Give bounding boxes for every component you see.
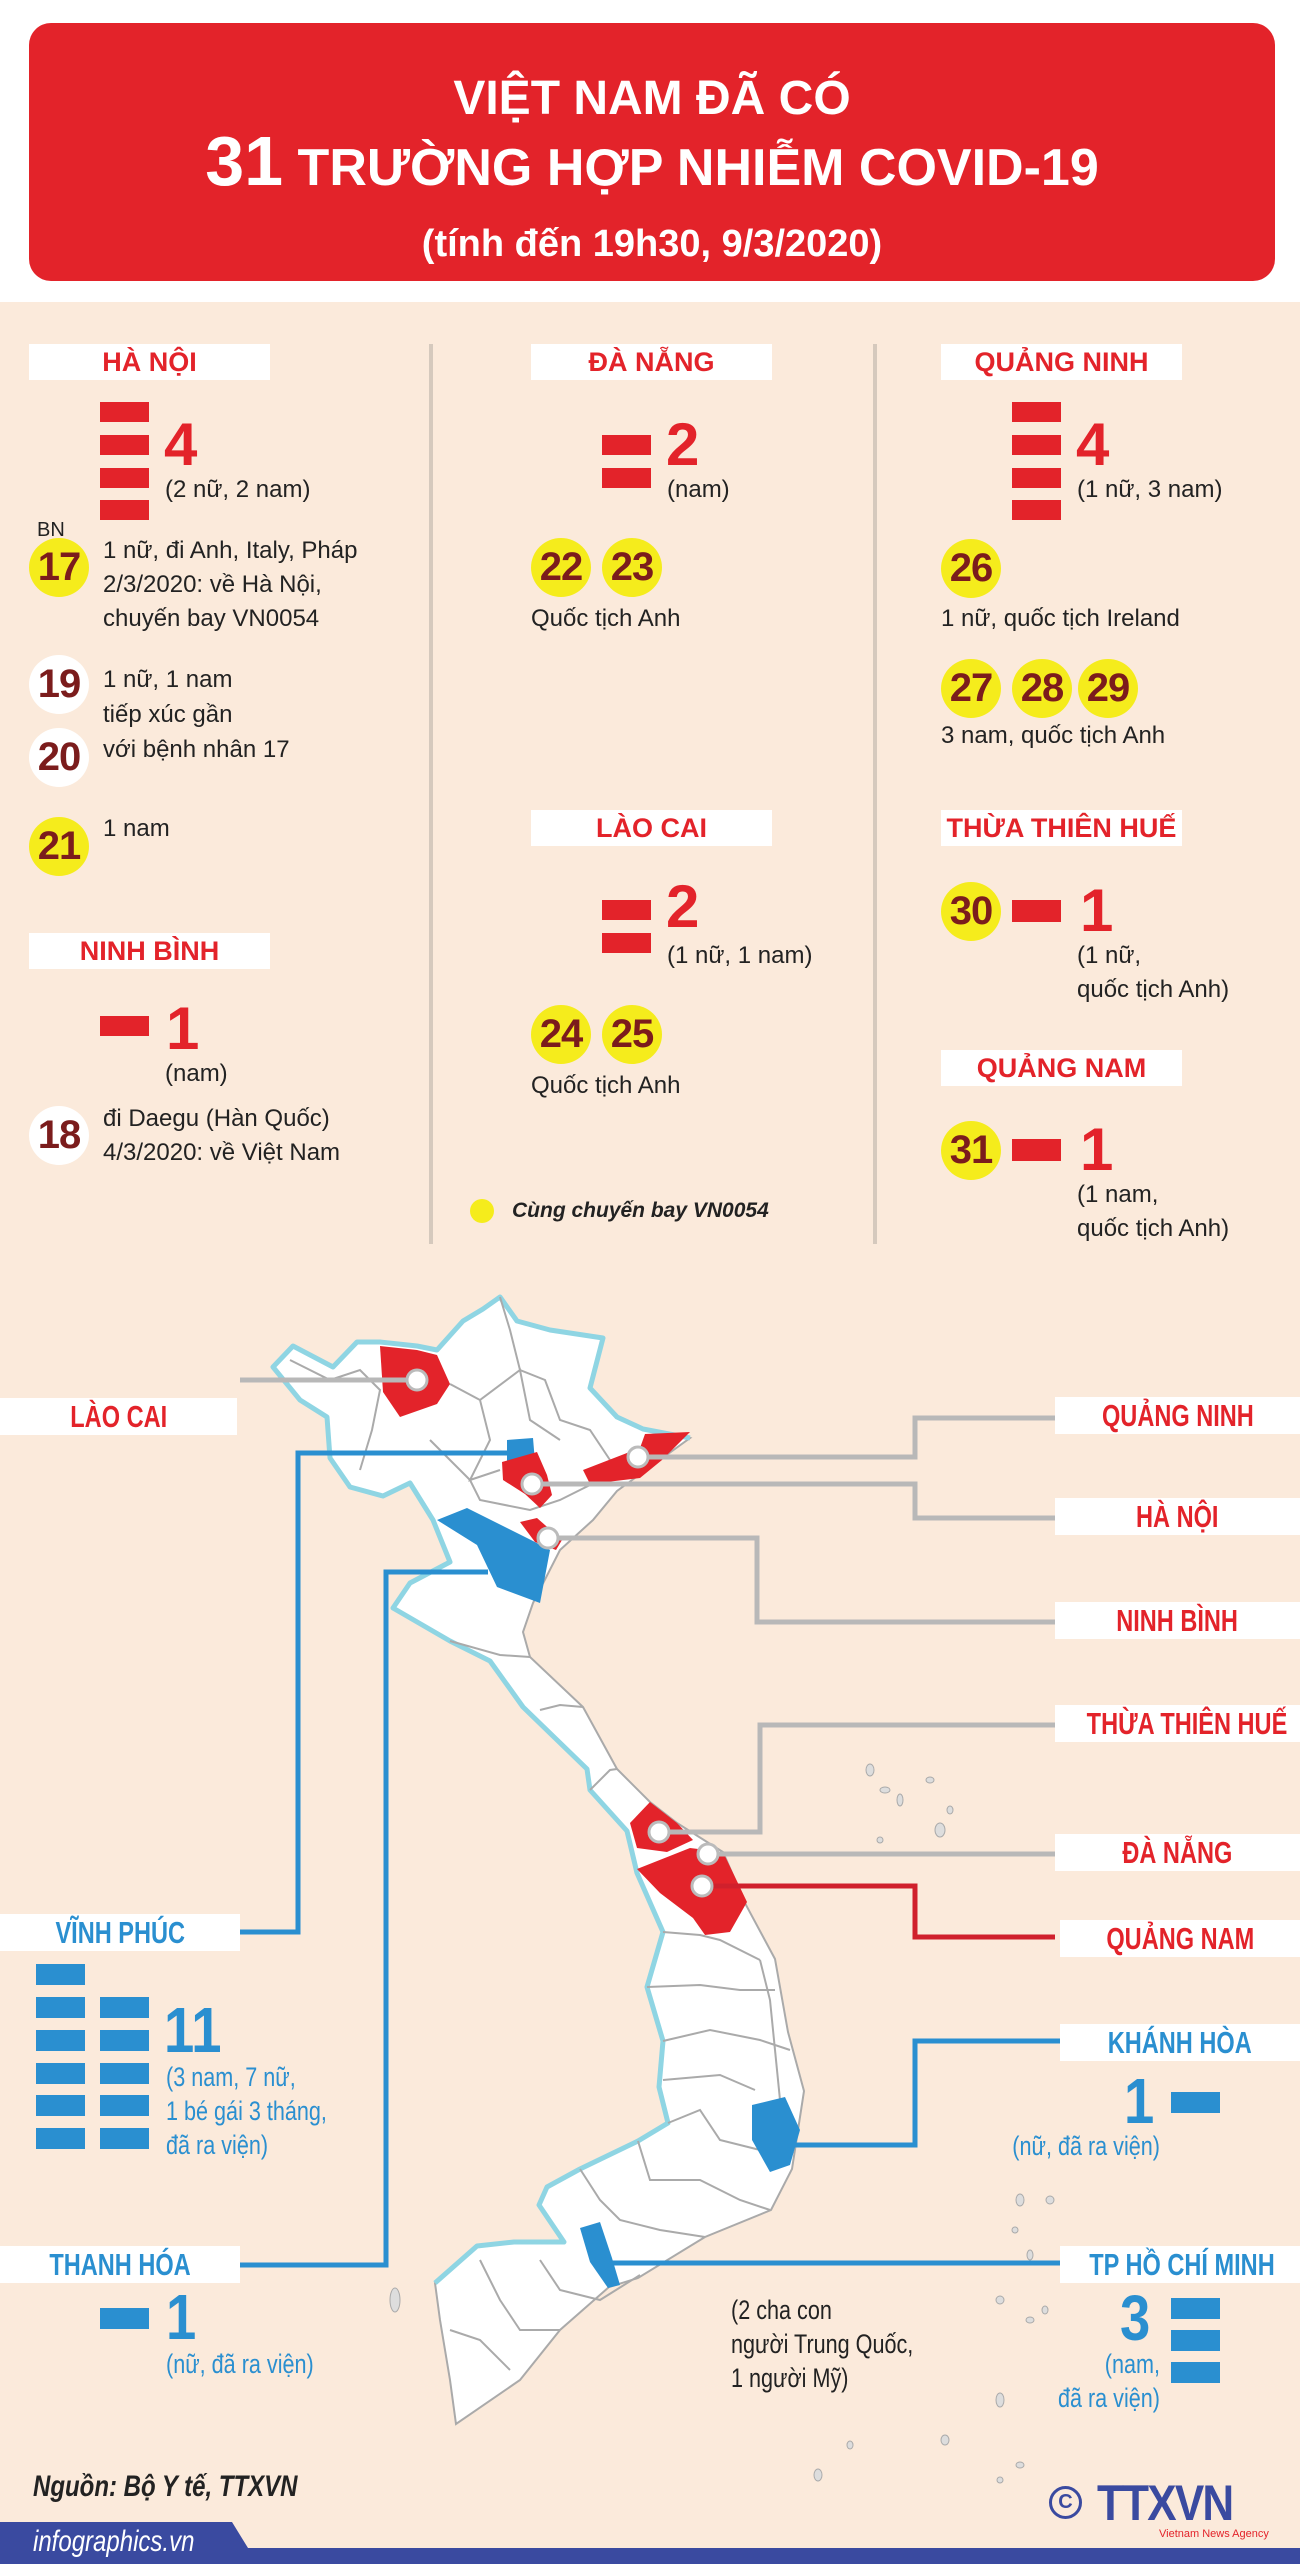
highlighted provinces: [380, 1346, 450, 1417]
panel: Ninh Binh: [29, 933, 270, 969]
panel: Vinh Phuc: VĨNH PHÚC: [55, 1915, 185, 1950]
logo TTXVN: [1049, 2475, 1269, 2540]
text: tiếp xúc gần: [103, 701, 232, 728]
text: 20: [38, 735, 80, 779]
HCM note: [731, 2295, 913, 2393]
case 19 20: [29, 655, 89, 714]
text: 2/3/2020: về Hà Nội,: [103, 571, 322, 598]
heading Ha Noi: HÀ NỘI: [102, 347, 197, 377]
panel: Thua Thien Hue: THỪA THIÊN HUẾ: [947, 813, 1176, 843]
text: 24: [540, 1012, 582, 1056]
text: 2: [666, 411, 699, 478]
text: 31: [950, 1128, 992, 1172]
dividers: [429, 344, 433, 1244]
text: quốc tịch Anh): [1077, 976, 1229, 1003]
text: (2 nữ, 2 nam): [165, 476, 310, 503]
text: đã ra viện): [1058, 2383, 1160, 2413]
text: (1 nữ, 1 nam): [667, 942, 812, 969]
text: 1 nữ, đi Anh, Italy, Pháp: [103, 537, 357, 564]
text: (nữ, đã ra viện): [166, 2349, 314, 2379]
text: 3: [1120, 2282, 1150, 2354]
panel: Lao Cai: LÀO CAI: [596, 813, 707, 843]
panel: TP Ho Chi Minh: TP HỒ CHÍ MINH: [1089, 2247, 1275, 2282]
panel: Lao Cai: [531, 810, 772, 846]
text: 1: [1124, 2065, 1154, 2137]
text: chuyến bay VN0054: [103, 605, 319, 632]
text: 11: [164, 1994, 222, 2066]
title banner: [29, 23, 1275, 281]
logo TTXVN: TTXVN: [1097, 2475, 1232, 2531]
text: HÀ NỘI: [1136, 1499, 1219, 1534]
case 18: [29, 1106, 89, 1165]
text: (1 nữ,: [1077, 942, 1141, 969]
text: với bệnh nhân 17: [103, 736, 290, 763]
panel: Quang Nam: QUẢNG NAM: [977, 1053, 1146, 1083]
text: đi Daegu (Hàn Quốc): [103, 1105, 330, 1132]
heading Ha Noi: [29, 344, 270, 380]
map labels: LÀO CAI: [70, 1399, 167, 1434]
logo TTXVN: C: [1058, 2491, 1073, 2513]
text: 1: [1080, 1116, 1113, 1183]
text: 1: [166, 995, 199, 1062]
case 17: 17: [38, 545, 80, 589]
text: (nam,: [1105, 2349, 1160, 2379]
text: (nữ, đã ra viện): [1012, 2131, 1160, 2161]
dots: [407, 1370, 718, 1896]
panel: Vinh Phuc: [0, 1914, 240, 1951]
HCM note: (2 cha con: [731, 2295, 832, 2325]
text: (1 nữ, 3 nam): [1077, 476, 1222, 503]
text: 30: [950, 889, 992, 933]
islands: [390, 1764, 1054, 2483]
panel: Quang Ninh: QUẢNG NINH: [974, 347, 1148, 377]
panel: Thanh Hoa: THANH HÓA: [49, 2247, 191, 2282]
panel: Quang Ninh: [941, 344, 1182, 380]
text: 1: [1080, 877, 1113, 944]
HCM note: 1 người Mỹ): [731, 2363, 848, 2393]
title banner: VIỆT NAM ĐÃ CÓ: [453, 72, 851, 125]
text: 26: [950, 546, 992, 590]
text: (3 nam, 7 nữ,: [166, 2062, 296, 2092]
case 18: 18: [38, 1113, 80, 1157]
text: đã ra viện): [166, 2130, 268, 2160]
HCM note: người Trung Quốc,: [731, 2329, 913, 2359]
text: Quốc tịch Anh: [531, 605, 680, 632]
text: 27: [950, 666, 992, 710]
text: BN: [37, 519, 65, 541]
connector lines: [240, 1380, 1060, 2265]
text: QUẢNG NINH: [1102, 1398, 1253, 1433]
panel: Ninh Binh: NINH BÌNH: [80, 936, 219, 966]
panel: Khanh Hoa: [1060, 2024, 1300, 2061]
case 21: 21: [38, 824, 80, 868]
case 21: [29, 817, 89, 876]
text: 4/3/2020: về Việt Nam: [103, 1139, 340, 1166]
text: THỪA THIÊN HUẾ: [1087, 1706, 1287, 1741]
footer bar: [0, 2522, 1300, 2564]
text: (1 nam,: [1077, 1181, 1158, 1208]
text: NINH BÌNH: [1117, 1603, 1238, 1638]
text: 23: [611, 545, 653, 589]
text: 1 nam: [103, 815, 170, 842]
text: ĐÀ NẴNG: [1123, 1835, 1232, 1870]
count Ha Noi: 4: [164, 411, 197, 478]
panel: Da Nang: ĐÀ NẴNG: [588, 347, 714, 377]
text: 1 nữ, quốc tịch Ireland: [941, 605, 1180, 632]
text: 28: [1021, 666, 1063, 710]
text: 1: [166, 2281, 196, 2353]
text: Quốc tịch Anh: [531, 1072, 680, 1099]
title banner: (tính đến 19h30, 9/3/2020): [422, 223, 882, 265]
panel: Khanh Hoa: KHÁNH HÒA: [1108, 2025, 1252, 2060]
logo TTXVN: Vietnam News Agency: [1159, 2528, 1269, 2540]
panel: Da Nang: [531, 344, 772, 380]
text: 4: [1076, 411, 1109, 478]
text: 1 bé gái 3 tháng,: [166, 2096, 327, 2126]
legend: Cùng chuyến bay VN0054: [512, 1199, 769, 1222]
text: 29: [1087, 666, 1129, 710]
source: Nguồn: Bộ Y tế, TTXVN: [33, 2470, 297, 2503]
case 19 20: 19: [38, 662, 80, 706]
text: QUẢNG NAM: [1106, 1921, 1254, 1956]
text: 25: [611, 1012, 653, 1056]
case 17: [29, 538, 89, 597]
text: (nam): [667, 476, 730, 503]
panel: Thanh Hoa: [0, 2246, 240, 2283]
title banner: 31 TRƯỜNG HỢP NHIỄM COVID-19: [205, 122, 1099, 200]
text: 22: [540, 545, 582, 589]
panel: Quang Nam: [941, 1050, 1182, 1086]
text: (nam): [165, 1060, 228, 1087]
text: 1 nữ, 1 nam: [103, 666, 232, 693]
map labels: [0, 1398, 237, 1435]
text: quốc tịch Anh): [1077, 1215, 1229, 1242]
footer bar: infographics.vn: [33, 2525, 194, 2558]
text: 2: [666, 873, 699, 940]
text: 3 nam, quốc tịch Anh: [941, 722, 1165, 749]
